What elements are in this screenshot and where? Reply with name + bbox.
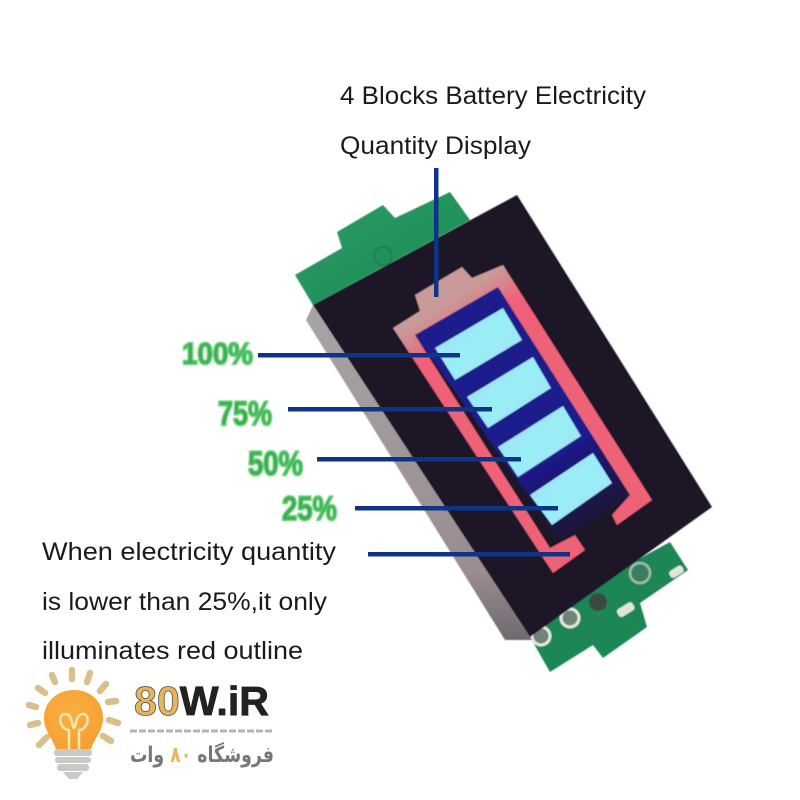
navy interior	[415, 287, 632, 540]
pointer: 50%	[317, 457, 521, 462]
note text: is lower than 25%,it only	[42, 588, 328, 616]
dotted divider	[130, 730, 272, 732]
note text: illuminates red outline	[42, 637, 303, 665]
persian tagline: فروشگاه ۸۰ وات	[130, 741, 274, 768]
cell 100%	[435, 308, 522, 380]
brand name: 80W.iR	[134, 678, 269, 724]
module: battery display board	[295, 192, 712, 672]
percent labels: 50%	[248, 445, 303, 483]
cell 50%	[498, 406, 581, 477]
percent labels: 25%	[282, 490, 337, 528]
title text	[340, 82, 647, 160]
cell 25%	[530, 453, 612, 525]
smd part left	[616, 601, 636, 618]
pointer: 25%	[355, 506, 558, 510]
percent labels	[182, 336, 337, 528]
bulb glass	[44, 690, 103, 749]
grey side wall	[306, 305, 532, 640]
pointer: red outline	[368, 552, 570, 556]
solder pad	[561, 609, 579, 627]
red battery outline	[393, 265, 652, 573]
screw base	[54, 749, 92, 779]
solder pad	[532, 627, 550, 645]
mounting hole	[374, 247, 392, 265]
pointer: title	[434, 168, 438, 297]
icon: light bulb	[29, 670, 118, 779]
pointer: 75%	[288, 407, 492, 412]
percent labels: 100%	[182, 336, 253, 371]
bulb rays	[29, 670, 118, 745]
smd part right	[668, 564, 685, 579]
percent labels: 75%	[218, 395, 272, 433]
filament	[60, 714, 88, 749]
pointer lines	[258, 168, 570, 556]
black face	[313, 195, 712, 637]
title text: Quantity Display	[340, 132, 532, 160]
note text	[42, 538, 337, 665]
pointer: 100%	[258, 353, 460, 358]
top green PCB tab	[295, 192, 470, 305]
logo: 80W.iR	[29, 670, 274, 779]
component pad	[630, 563, 650, 583]
cell 75%	[467, 357, 551, 428]
dark component	[589, 593, 607, 611]
note text: When electricity quantity	[42, 538, 337, 566]
bottom green PCB	[530, 542, 688, 672]
title text: 4 Blocks Battery Electricity	[340, 82, 647, 110]
